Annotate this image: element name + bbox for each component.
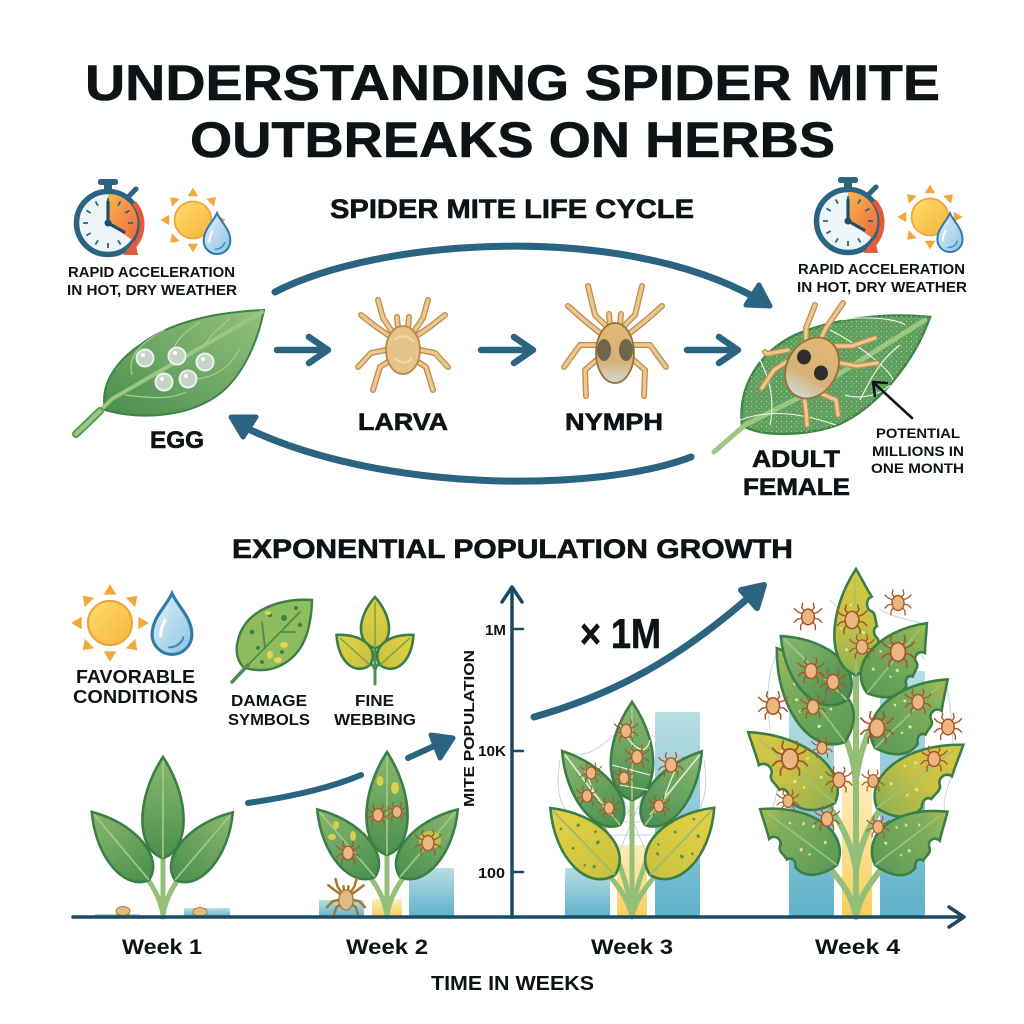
icon: sun and drop right [897,184,963,252]
label: adult female: ADULT [752,446,840,473]
callout: rapid acceleration right: RAPID ACCELERATION [798,262,965,278]
webbing [768,600,955,815]
icon: sun [71,584,149,662]
bars: week 1 [95,908,230,917]
label: favorable conditions [73,667,198,707]
x axis labels: Week 4 [815,936,900,959]
x axis [73,907,964,927]
title: OUTBREAKS ON HERBS [190,112,835,168]
arrow: return to egg [231,417,691,481]
label: fine webbing: WEBBING [334,712,416,729]
panel: life cycle [67,177,968,501]
x axis title: TIME IN WEEKS [431,973,594,995]
label: fine webbing: FINE [355,693,394,710]
callout: potential millions: MILLIONS IN [872,443,964,459]
mites: week 4 [759,590,962,837]
callout: potential millions [871,425,964,476]
icon: damaged leaf [232,600,312,682]
plant: week 2 [302,752,473,917]
label: adult female [743,446,850,501]
label: adult female: FEMALE [743,474,850,501]
y axis tick labels: 10K [478,743,506,760]
legend: damage symbols [228,600,312,729]
damage spots: week 2 [328,776,441,849]
callout: potential millions: ONE MONTH [871,460,964,476]
arrow: black pointer [873,382,912,418]
icon: yellow sprig [327,597,423,684]
icon: water drop [152,593,192,654]
mites: week 3 [577,719,683,818]
label: favorable conditions: FAVORABLE [76,667,195,687]
arrow: egg to larva [277,337,328,363]
y axis tick labels: 100 [478,865,505,882]
nymph mite [564,286,666,396]
plant: week 1 [77,757,248,917]
mite on adult leaf [762,303,877,425]
callout: rapid acceleration right: IN HOT, DRY WEATHER [797,280,968,296]
label: damage symbols: DAMAGE [231,693,307,710]
x axis labels [122,936,900,959]
plant: week 3 [533,702,731,917]
callout: rapid acceleration left: RAPID ACCELERATION [68,265,235,281]
x axis labels: Week 2 [346,936,428,959]
arrow: larva to nymph [481,337,533,363]
arrow: nymph to adult [687,337,738,363]
mites: week 1 [115,906,208,917]
bars: week 3 [565,712,700,917]
webbing [558,735,706,850]
egg stage: leaf with eggs [76,310,264,434]
y axis [502,587,523,917]
axes [73,587,964,995]
icon: sun and drop left [160,187,230,254]
callout: rapid acceleration left: IN HOT, DRY WEATHER [67,283,238,299]
icon: stopwatch right [816,177,882,253]
adult stage: webbed leaf with mite [714,303,930,452]
title: UNDERSTANDING SPIDER MITE [85,55,940,111]
bar chart [95,671,925,917]
callout: rapid acceleration left [67,265,238,299]
y axis title: MITE POPULATION [461,650,478,807]
label: egg: EGG [150,427,204,454]
title [85,55,940,168]
legend: favorable conditions [71,584,198,707]
label: favorable conditions: CONDITIONS [73,687,198,707]
label: nymph: NYMPH [565,409,663,436]
heading: life cycle: SPIDER MITE LIFE CYCLE [330,194,694,224]
arrow: adult stage loop from egg [275,246,770,306]
plant: week 4 [731,569,979,917]
bars: week 2 [319,868,454,917]
label: times one million: × 1M [580,610,661,657]
label: larva: LARVA [358,409,448,436]
callout: potential millions: POTENTIAL [876,425,960,441]
x axis labels: Week 3 [591,936,673,959]
label: damage symbols [228,693,310,729]
white web on leaves [565,725,700,815]
callout: rapid acceleration right [797,262,968,296]
arrow: early growth curve [248,735,453,803]
heading: population growth: EXPONENTIAL POPULATION GROWTH [232,534,793,564]
x axis labels: Week 1 [122,936,202,959]
mites: week 2 [327,802,441,917]
bars: week 4 [789,671,925,917]
y axis tick labels: 1M [485,622,506,639]
legend: fine webbing [327,597,423,729]
label: damage symbols: SYMBOLS [228,712,310,729]
arrow: exponential growth curve [534,585,764,717]
label: fine webbing [334,693,416,729]
icon: stopwatch left [76,179,142,255]
y axis tick labels [478,622,506,882]
larva mite [358,300,448,390]
